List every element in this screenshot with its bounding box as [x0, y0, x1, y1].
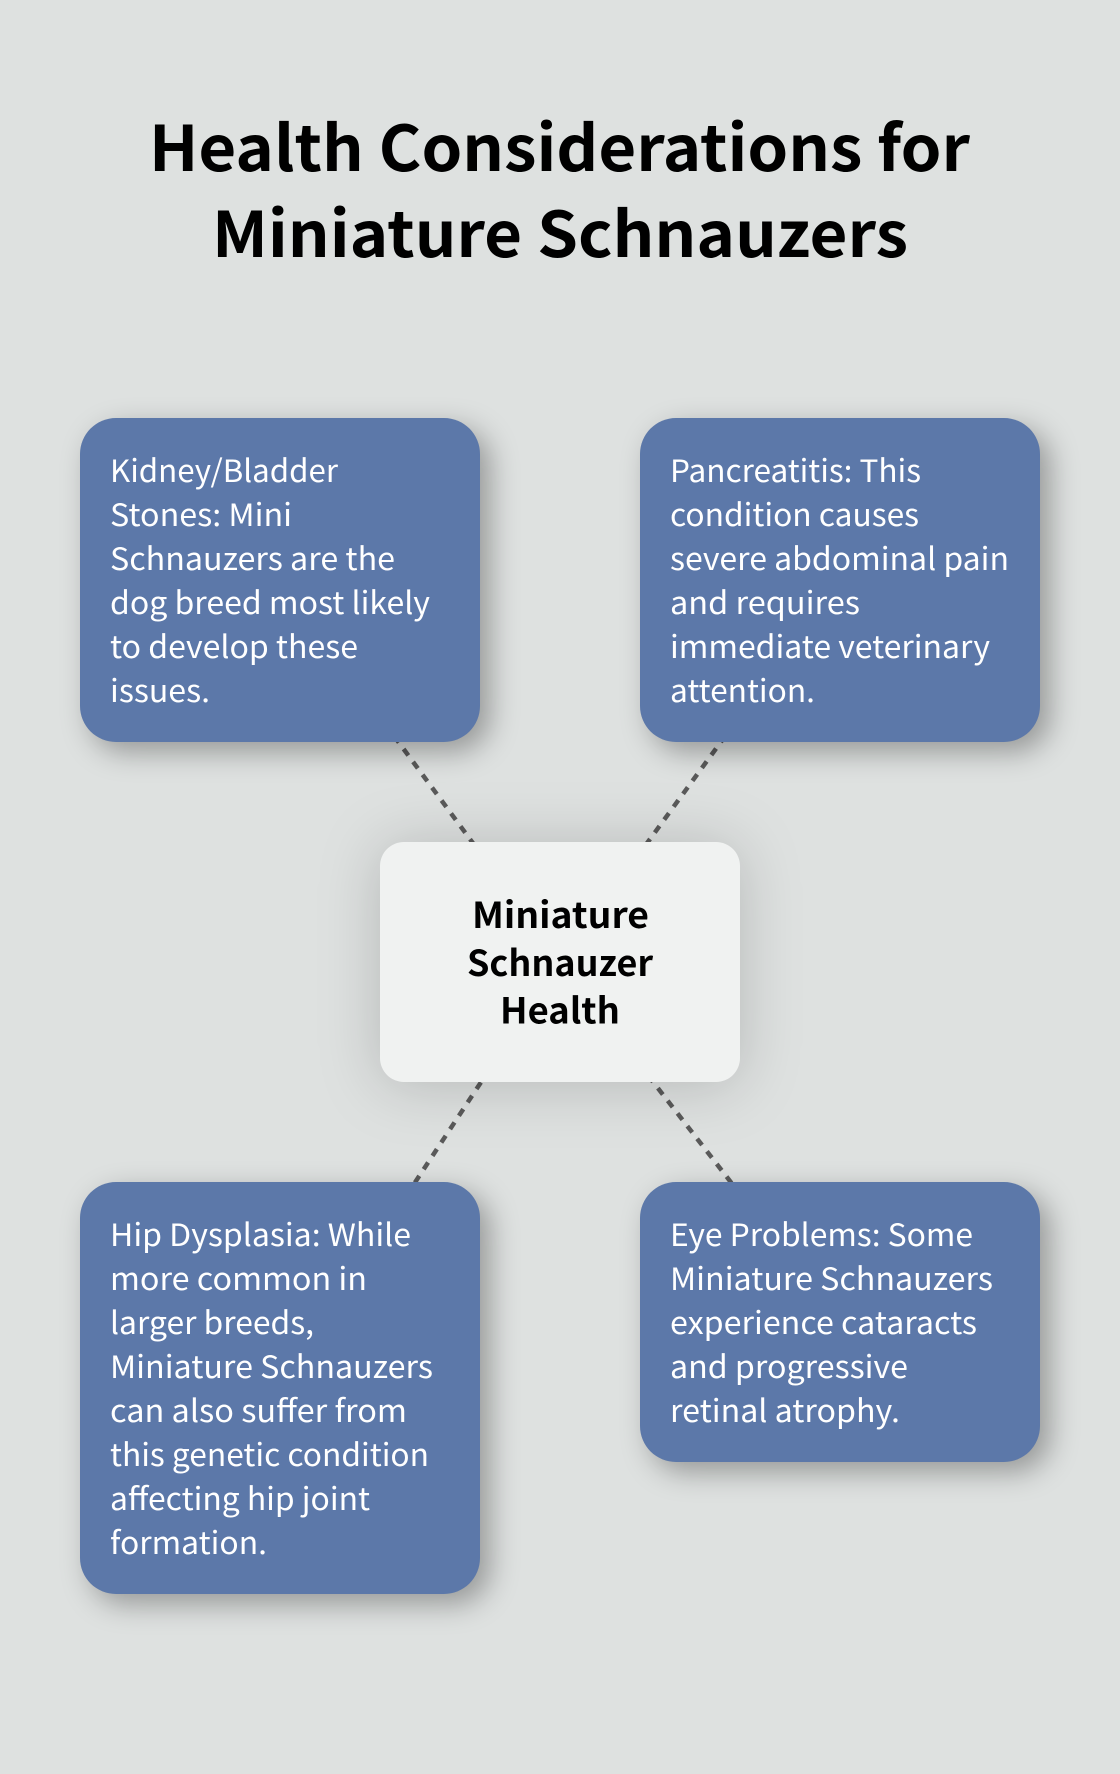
connector: pancreatitis to center	[643, 736, 726, 849]
panel: hip dysplasia	[80, 1182, 480, 1594]
panel: eye problems: and progressive	[670, 1342, 908, 1387]
panel: eye problems: Eye Problems: Some	[670, 1210, 973, 1255]
panel: pancreatitis: Pancreatitis: This	[670, 446, 921, 491]
panel: hip dysplasia: can also suffer from	[110, 1386, 407, 1431]
panel: kidney and bladder stones: Schnauzers are the	[110, 534, 395, 579]
panel: hip dysplasia: affecting hip joint	[110, 1474, 370, 1519]
panel: kidney and bladder stones: Stones: Mini	[110, 490, 292, 535]
panel: kidney and bladder stones: dog breed most likely	[110, 578, 430, 623]
panel: hip dysplasia: this genetic condition	[110, 1430, 429, 1475]
panel: center topic: Miniature	[472, 888, 649, 939]
panel: kidney and bladder stones	[80, 418, 480, 742]
panel: center topic: Health	[500, 984, 620, 1034]
panel: pancreatitis: attention.	[670, 666, 815, 711]
panel: eye problems: experience cataracts	[670, 1298, 977, 1343]
panel: center topic	[380, 842, 740, 1082]
panel: hip dysplasia: larger breeds,	[110, 1298, 314, 1343]
panel: pancreatitis	[640, 418, 1040, 742]
title	[149, 99, 971, 276]
title: Miniature Schnauzers	[212, 185, 908, 276]
panel: pancreatitis: condition causes	[670, 490, 919, 535]
panel: hip dysplasia: Miniature Schnauzers	[110, 1342, 433, 1387]
panel: pancreatitis: and requires	[670, 578, 860, 623]
panel: eye problems: retinal atrophy.	[670, 1386, 900, 1431]
connector: kidney stones to center	[394, 736, 477, 849]
panel: eye problems	[640, 1182, 1040, 1462]
panel: eye problems: Miniature Schnauzers	[670, 1254, 993, 1299]
panel: hip dysplasia: formation.	[110, 1518, 267, 1563]
panel: kidney and bladder stones: to develop these	[110, 622, 358, 667]
panel: center topic: Schnauzer	[467, 936, 654, 987]
panel: pancreatitis: severe abdominal pain	[670, 534, 1009, 579]
connector: hip dysplasia to center	[413, 1069, 490, 1186]
connector: eye problems to center	[648, 1076, 734, 1186]
panel: pancreatitis: immediate veterinary	[670, 622, 990, 667]
panel: hip dysplasia: Hip Dysplasia: While	[110, 1210, 411, 1255]
panel: kidney and bladder stones: issues.	[110, 666, 210, 711]
panel: kidney and bladder stones: Kidney/Bladder	[110, 446, 339, 491]
title: Health Considerations for	[149, 99, 971, 190]
panel: hip dysplasia: more common in	[110, 1254, 367, 1299]
